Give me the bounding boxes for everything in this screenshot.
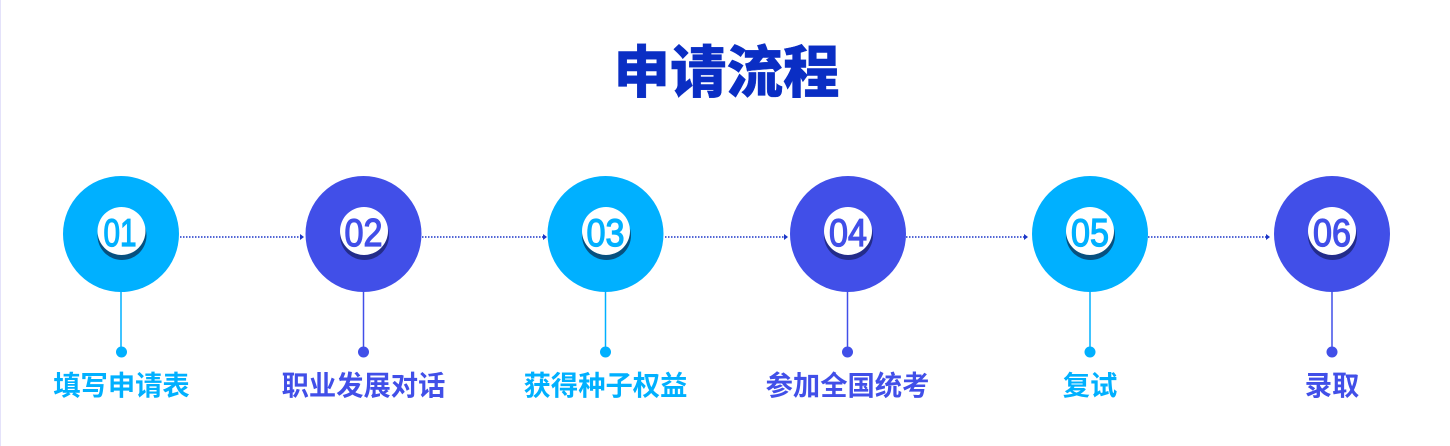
step 3: 获得种子权益: 获得种子权益 bbox=[524, 370, 687, 401]
arrow: step 1 to 2 bbox=[180, 234, 304, 240]
step 6: 录取 bbox=[1274, 176, 1390, 401]
arrow: step 2 to 3 bbox=[422, 234, 547, 240]
step 3: 获得种子权益 bbox=[524, 176, 687, 401]
step 1: 填写申请表: 01 bbox=[104, 212, 136, 255]
step 3: 获得种子权益: 03 bbox=[586, 212, 624, 255]
step 6: 录取: 录取 bbox=[1305, 370, 1359, 401]
step 1: 填写申请表 bbox=[53, 176, 190, 401]
arrow: step 5 to 6 bbox=[1148, 234, 1270, 240]
arrow: step 3 to 4 bbox=[665, 234, 788, 240]
step 2: 职业发展对话: 职业发展对话 bbox=[282, 370, 445, 401]
title: 申请流程 bbox=[614, 41, 840, 104]
step 5: 复试: 复试 bbox=[1063, 370, 1117, 401]
step 4: 参加全国统考 bbox=[766, 176, 929, 401]
arrow: step 4 to 5 bbox=[906, 234, 1028, 240]
step 5: 复试: 05 bbox=[1071, 212, 1109, 255]
step 2: 职业发展对话 bbox=[282, 176, 445, 401]
step 2: 职业发展对话: 02 bbox=[344, 212, 382, 255]
step 6: 录取: 06 bbox=[1313, 212, 1351, 255]
step 5: 复试 bbox=[1032, 176, 1148, 401]
step 4: 参加全国统考: 参加全国统考 bbox=[766, 370, 929, 401]
step 4: 参加全国统考: 04 bbox=[829, 212, 867, 255]
step 1: 填写申请表: 填写申请表 bbox=[53, 370, 190, 401]
